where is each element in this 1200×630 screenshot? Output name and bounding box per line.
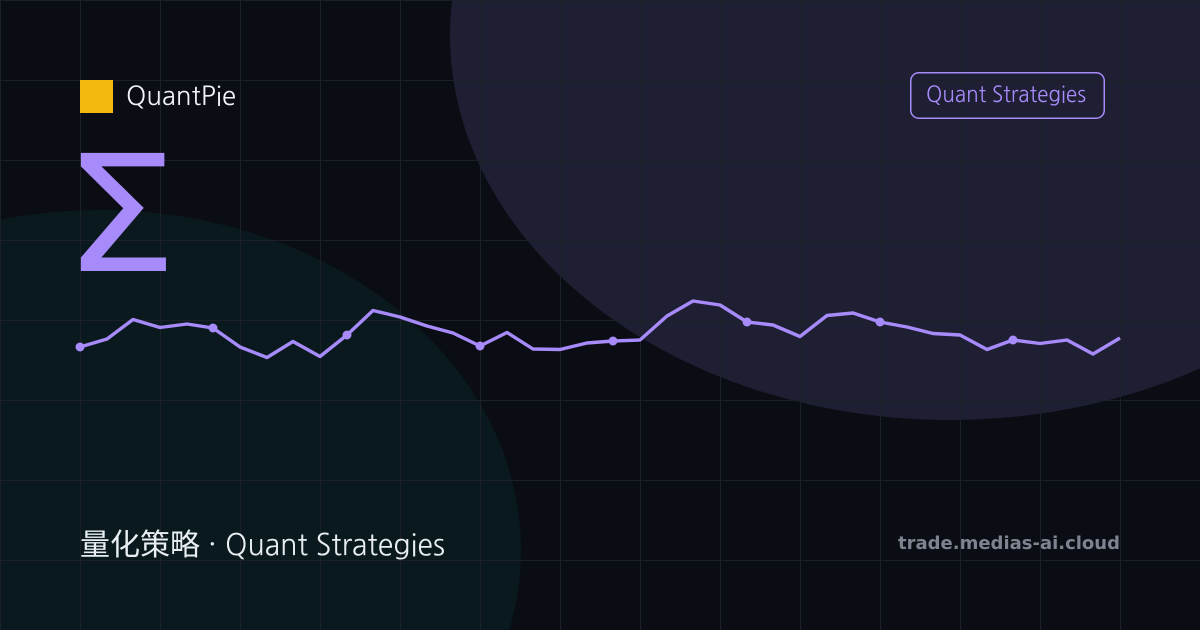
icon: sigma symbol: Σ [63, 121, 178, 310]
icon: brand square [80, 80, 113, 113]
background blob: purple ellipse [450, 0, 1200, 420]
tag: Quant Strategies [911, 73, 1104, 118]
subtitle: Quant Strategies [225, 530, 445, 560]
subtitle: · [208, 530, 217, 560]
subtitle: 量化策略 [80, 529, 200, 560]
background blob: teal ellipse [0, 210, 521, 630]
subtitle [80, 529, 445, 560]
site url: trade.medias-ai.cloud [898, 533, 1120, 554]
tag: Quant Strategies: Quant Strategies [926, 84, 1086, 106]
line chart [76, 301, 1120, 358]
brand name: QuantPie [126, 83, 236, 109]
